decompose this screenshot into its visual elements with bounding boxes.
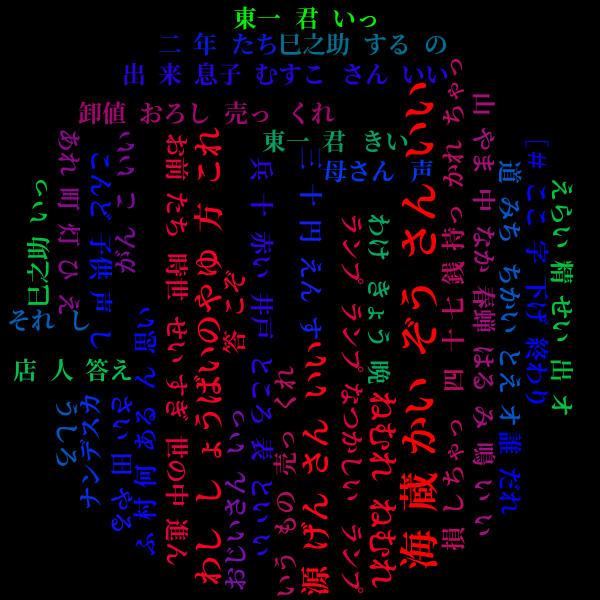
horizontal line: 母さん 声: 母さん	[323, 159, 395, 186]
column: 山 やま 中 なか 春蝉 はる み 鳴 いい: 中	[469, 188, 496, 212]
column: 三 十 円 えん す: す	[296, 316, 322, 340]
column: えらい 精 せい 出 オ: えらい	[547, 177, 574, 249]
column: さい 田 やる: 田	[107, 452, 133, 476]
column: 兵 十 赤い 井戸 ところ 表 とい い: ところ	[247, 354, 273, 426]
column: 山 やま 中 なか 春蝉 はる み 鳴 いい: はる	[469, 345, 495, 393]
horizontal line: 東一 君 きい: きい	[361, 130, 409, 156]
column: 兵 十 赤い 井戸 ところ 表 とい い: 兵	[247, 157, 274, 182]
column: わけ きょう 晩: きょう	[364, 277, 391, 349]
column: お前 たち 時世 せい すぎ 世の中 進ん: 世の中	[162, 435, 189, 507]
column: 損 し ちゃっ 四 十 七 銭 持っ かれ ちゃっ: ちゃっ	[442, 416, 468, 488]
horizontal line: 東一 君 いっ: いっ	[332, 7, 380, 33]
column: [＃ ここ 字 下げ 終わり: 終わり	[522, 337, 549, 409]
horizontal line: 母さん 声	[323, 159, 434, 186]
column: 思い ん ある 何 村 ふ: ん	[134, 366, 160, 390]
column: わし しょうばいの やゆ 方 これ: これ	[194, 127, 226, 187]
column: [＃ ここ 字 下げ 終わり: 下げ	[522, 276, 549, 324]
column: 海 蔵 かい ぞう さん いい: 海	[398, 530, 442, 570]
horizontal line: 二 年 たち 巳之助 する の: する	[363, 33, 411, 59]
horizontal line: 東一 君 きい	[262, 129, 409, 156]
column: 損 し ちゃっ 四 十 七 銭 持っ かれ ちゃっ: し	[442, 492, 468, 516]
column: おじいさん いっ: おじいさん	[224, 471, 250, 591]
column: 道 みち ちかい とえ オ 誰 だれ: 道	[495, 160, 522, 184]
column: お前 たち 時世 せい すぎ 世の中 進ん: せい	[162, 316, 188, 364]
column: 兵 十 赤い 井戸 ところ 表 とい い: 赤い	[247, 231, 274, 279]
horizontal line: 卸値 おろし 売っ くれ	[78, 101, 335, 128]
horizontal line: 出 来 息子 むすこ さん いい: いい	[401, 63, 449, 89]
horizontal line: それ し: し	[68, 309, 92, 335]
horizontal line: 母さん 声: 声	[410, 159, 434, 186]
horizontal line: 出 来 息子 むすこ さん いい: 出	[122, 62, 146, 89]
column: いう もの 売っ くれ: いう	[273, 550, 300, 598]
column: あれ 町 灯 ひ え: え	[54, 292, 81, 316]
horizontal line: 東一 君 いっ	[233, 6, 380, 33]
column: えらい 精 せい 出 オ: オ	[547, 393, 573, 417]
column: 兵 十 赤い 井戸 ところ 表 とい い: とい	[247, 476, 273, 524]
column: 道 みち ちかい とえ オ 誰 だれ: とえ	[495, 346, 522, 394]
column: さい 田 やる: さい	[107, 393, 133, 441]
column: 損 し ちゃっ 四 十 七 銭 持っ かれ ちゃっ: かれ	[442, 140, 468, 188]
column: 思い ん ある 何 村 ふ: 村	[133, 497, 160, 521]
column: 源 げん さん いい: げん	[300, 492, 334, 552]
horizontal line: 東一 君 いっ: 君	[295, 6, 319, 33]
column: えらい 精 せい 出 オ: せい	[547, 295, 573, 343]
column: いい こ がん: いい	[114, 130, 140, 178]
column: 源 げん さん いい	[300, 340, 334, 596]
column: ねむれ ねむれ	[364, 391, 398, 588]
horizontal line: 出 来 息子 むすこ さん いい	[122, 62, 449, 89]
column: 思い ん ある 何 村 ふ: ふ	[134, 532, 160, 556]
column: いい こ がん: こ	[114, 189, 140, 213]
column: 損 し ちゃっ 四 十 七 銭 持っ かれ ちゃっ: 銭	[441, 261, 468, 285]
column: あれ 町 灯 ひ え	[54, 128, 81, 316]
column: 海 蔵 かい ぞう さん いい	[398, 80, 442, 570]
column: お前 たち 時世 せい すぎ 世の中 進ん: 時世	[162, 253, 189, 301]
column: 海 蔵 かい ぞう さん いい: ぞう	[398, 277, 442, 357]
column: 山 やま 中 なか 春蝉 はる み 鳴 いい: い	[469, 513, 495, 537]
horizontal line: 二 年 たち 巳之助 する の: 巳之助	[278, 32, 350, 59]
horizontal line: 店 人 答え: 答え	[85, 358, 133, 385]
column: こんど 子供 声 し: こんど	[86, 149, 112, 221]
column: 三 十 円 えん す	[296, 146, 323, 340]
column: ランプ ランプ なつかしい ランプ: ランプ	[337, 521, 364, 593]
column: ナンデスカ: ナンデスカ	[79, 392, 105, 510]
horizontal line: 卸値 おろし 売っ くれ: 売っ	[224, 101, 272, 128]
column: あれ 町 灯 ひ え: ひ	[54, 257, 80, 281]
column: ねむれ ねむれ: ねむれ	[364, 391, 398, 481]
column: 兵 十 赤い 井戸 ところ 表 とい い: い	[247, 533, 273, 557]
column: 答 こぞ: こぞ	[223, 270, 249, 318]
column: 兵 十 赤い 井戸 ところ 表 とい い: 十	[247, 193, 274, 217]
column: いい こ がん: がん	[114, 226, 140, 274]
column: えらい 精 せい 出 オ	[547, 177, 574, 417]
column: [＃ ここ 字 下げ 終わり: ［＃	[522, 124, 549, 172]
horizontal line: それ し	[7, 309, 92, 335]
column: いう もの 売っ くれ	[273, 366, 300, 598]
column: お前 たち 時世 せい すぎ 世の中 進ん: たち	[162, 191, 188, 239]
horizontal line: 店 人 答え: 人	[50, 359, 74, 385]
column: 三 十 円 えん す: 十	[296, 183, 323, 207]
column: あれ 町 灯 ひ え: あれ	[54, 128, 80, 176]
column: 思い ん ある 何 村 ふ: 思い	[133, 306, 160, 354]
column: ランプ ランプ なつかしい ランプ: ランプ	[337, 212, 364, 284]
column: 山 やま 中 なか 春蝉 はる み 鳴 いい: み	[469, 405, 495, 429]
column: 兵 十 赤い 井戸 ところ 表 とい い	[247, 157, 274, 557]
column: 損 し ちゃっ 四 十 七 銭 持っ かれ ちゃっ: 七	[441, 296, 468, 320]
column: うしろ: うしろ	[52, 397, 79, 469]
column: わけ きょう 晩	[364, 213, 391, 384]
column: いう もの 売っ くれ: くれ	[274, 366, 300, 414]
column: 山 やま 中 なか 春蝉 はる み 鳴 いい: い	[469, 478, 495, 502]
column: ねむれ ねむれ: ねむれ	[364, 498, 398, 588]
column: いっ 巳之助: いっ	[27, 176, 53, 224]
column: いい こ がん	[114, 130, 140, 274]
column: 源 げん さん いい: さん	[300, 418, 334, 478]
column: わし しょうばいの やゆ 方 これ: 方	[194, 202, 226, 232]
column: ランプ ランプ なつかしい ランプ: なつかしい	[337, 382, 363, 502]
column: お前 たち 時世 せい すぎ 世の中 進ん: すぎ	[162, 373, 189, 421]
column: 損 し ちゃっ 四 十 七 銭 持っ かれ ちゃっ: 十	[441, 328, 468, 352]
column: 損 し ちゃっ 四 十 七 銭 持っ かれ ちゃっ: 持っ	[441, 203, 468, 251]
column: こんど 子供 声 し: 声	[86, 290, 113, 314]
column: 海 蔵 かい ぞう さん いい: いい	[398, 80, 442, 160]
column: わけ きょう 晩: 晩	[364, 360, 391, 384]
horizontal line: 二 年 たち 巳之助 する の: 年	[193, 31, 217, 59]
column: [＃ ここ 字 下げ 終わり	[522, 124, 549, 409]
column: 山 やま 中 なか 春蝉 はる み 鳴 いい: やま	[469, 127, 495, 175]
horizontal line: 店 人 答え	[13, 358, 133, 385]
horizontal line: 二 年 たち 巳之助 する の: 二	[158, 33, 182, 59]
column: 損 し ちゃっ 四 十 七 銭 持っ かれ ちゃっ: 四	[442, 368, 468, 392]
column: お前 たち 時世 せい すぎ 世の中 進ん	[162, 133, 189, 566]
column: 海 蔵 かい ぞう さん いい: 蔵	[398, 472, 442, 512]
column: 山 やま 中 なか 春蝉 はる み 鳴 いい: 鳴	[469, 442, 496, 466]
column: さい 田 やる	[107, 393, 133, 535]
column: わし しょうばいの やゆ 方 これ	[194, 127, 226, 586]
column: えらい 精 せい 出 オ: 精	[547, 260, 574, 284]
horizontal line: 二 年 たち 巳之助 する の: たち	[231, 33, 279, 59]
column: あれ 町 灯 ひ え: 町	[54, 187, 81, 211]
column: 道 みち ちかい とえ オ 誰 だれ	[495, 160, 522, 515]
column: [＃ ここ 字 下げ 終わり: 字	[522, 240, 549, 264]
column: いっ 巳之助: 巳之助	[26, 236, 53, 308]
horizontal line: 卸値 おろし 売っ くれ: くれ	[287, 102, 335, 128]
column: 山 やま 中 なか 春蝉 はる み 鳴 いい: 春蝉	[469, 285, 496, 333]
horizontal line: 東一 君 きい: 君	[322, 129, 346, 156]
column: 道 みち ちかい とえ オ 誰 だれ: 誰	[495, 431, 522, 455]
column: 損 し ちゃっ 四 十 七 銭 持っ かれ ちゃっ: 損	[441, 526, 468, 551]
column: お前 たち 時世 せい すぎ 世の中 進ん: 進ん	[162, 518, 189, 566]
column: 答 こぞ	[222, 270, 249, 354]
column: 道 みち ちかい とえ オ 誰 だれ: オ	[495, 403, 521, 427]
column: [＃ ここ 字 下げ 終わり: ここ	[522, 181, 548, 229]
column: 道 みち ちかい とえ オ 誰 だれ: ちかい	[495, 262, 521, 334]
column: わし しょうばいの やゆ 方 これ: ゆ	[194, 248, 226, 278]
horizontal line: 二 年 たち 巳之助 する の: の	[424, 33, 448, 59]
horizontal line: 出 来 息子 むすこ さん いい: さん	[341, 63, 389, 89]
column: 損 し ちゃっ 四 十 七 銭 持っ かれ ちゃっ: ちゃっ	[442, 55, 468, 127]
horizontal line: 二 年 たち 巳之助 する の	[158, 31, 448, 59]
horizontal line: 東一 君 きい: 東一	[262, 129, 310, 156]
column: 山 やま 中 なか 春蝉 はる み 鳴 いい: なか	[469, 225, 495, 273]
column: えらい 精 せい 出 オ: 出	[547, 358, 574, 382]
column: いう もの 売っ くれ: 売っ	[273, 428, 300, 476]
column: 思い ん ある 何 村 ふ: ある	[134, 404, 160, 452]
column: 山 やま 中 なか 春蝉 はる み 鳴 いい	[469, 92, 496, 537]
column: 三 十 円 えん す: 円	[296, 219, 323, 243]
column: こんど 子供 声 し: 子供	[86, 232, 113, 282]
column: 山 やま 中 なか 春蝉 はる み 鳴 いい: 山	[469, 92, 496, 116]
column: こんど 子供 声 し: し	[86, 327, 112, 351]
column: あれ 町 灯 ひ え: 灯	[54, 222, 81, 247]
column: お前 たち 時世 せい すぎ 世の中 進ん: お前	[162, 133, 189, 181]
column: 道 みち ちかい とえ オ 誰 だれ: だれ	[495, 467, 521, 515]
horizontal line: 卸値 おろし 売っ くれ: おろし	[139, 102, 211, 128]
column: わし しょうばいの やゆ 方 これ: し	[194, 477, 226, 507]
column: 海 蔵 かい ぞう さん いい: さん	[398, 182, 442, 262]
horizontal line: 出 来 息子 むすこ さん いい: むすこ	[254, 63, 326, 89]
column: 源 げん さん いい: いい	[300, 340, 334, 400]
column: 兵 十 赤い 井戸 ところ 表 とい い: 井戸	[247, 292, 274, 340]
column: 三 十 円 えん す: 三	[296, 146, 322, 170]
column: こんど 子供 声 し	[86, 149, 113, 351]
column: 三 十 円 えん す: えん	[296, 255, 323, 303]
horizontal line: それ し: それ	[7, 309, 55, 335]
column: おじいさん いっ: いっ	[224, 407, 250, 455]
column: わし しょうばいの やゆ 方 これ: わし	[194, 526, 226, 586]
column: 源 げん さん いい: 源	[300, 563, 334, 596]
horizontal line: 東一 君 いっ: 東一	[233, 6, 281, 33]
column: 思い ん ある 何 村 ふ	[133, 306, 160, 556]
column: さい 田 やる: やる	[107, 487, 133, 535]
column: 兵 十 赤い 井戸 ところ 表 とい い: 表	[247, 437, 274, 461]
column: 海 蔵 かい ぞう さん いい: かい	[398, 376, 442, 456]
column: ランプ ランプ なつかしい ランプ: ランプ	[337, 300, 364, 372]
column: わし しょうばいの やゆ 方 これ: や	[194, 283, 226, 313]
column: ランプ ランプ なつかしい ランプ	[337, 212, 364, 593]
horizontal line: 店 人 答え: 店	[13, 358, 37, 385]
column: おじいさん いっ	[224, 407, 250, 591]
column: 思い ん ある 何 村 ふ: 何	[133, 464, 160, 488]
column: 損 し ちゃっ 四 十 七 銭 持っ かれ ちゃっ	[441, 55, 468, 551]
horizontal line: 出 来 息子 むすこ さん いい: 息子	[194, 62, 242, 89]
horizontal line: 卸値 おろし 売っ くれ: 卸値	[78, 101, 126, 128]
horizontal line: 出 来 息子 むすこ さん いい: 来	[158, 62, 182, 89]
column: いう もの 売っ くれ: もの	[274, 490, 300, 538]
column: 道 みち ちかい とえ オ 誰 だれ: みち	[495, 196, 521, 244]
column: わし しょうばいの やゆ 方 これ: ょうばいの	[194, 315, 226, 465]
column: 答 こぞ: 答	[222, 330, 249, 354]
column: いっ 巳之助	[26, 176, 53, 308]
column: わけ きょう 晩: わけ	[364, 213, 390, 261]
